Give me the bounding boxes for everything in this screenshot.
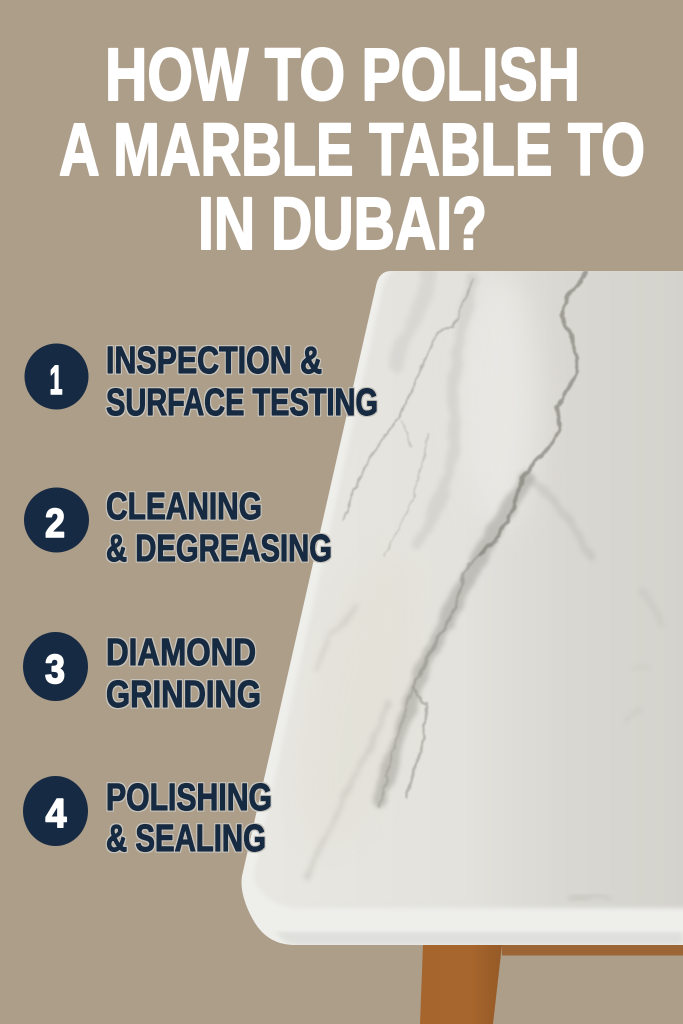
badge 3 [23,632,88,701]
step 2 [24,486,332,570]
step 4: 4 [46,790,67,836]
label 3: DIAMOND [106,632,256,674]
label 3: GRINDING [106,674,261,716]
illustration: marble table [241,268,683,1024]
table apron rail [502,945,683,956]
soft bands [417,280,473,543]
table top edge [241,271,683,945]
table bottom edge shade [275,932,683,945]
sharp veins [480,272,586,555]
table top surface and marble veins [253,268,683,908]
step 1: 1 [50,357,62,403]
step 4 [23,776,272,860]
step 3: 3 [45,646,65,692]
badge 4 [23,776,88,846]
label 4: POLISHING [106,777,272,819]
badge 1 [24,344,88,410]
badge 2 [24,488,89,552]
label 2: & DEGREASING [106,528,332,570]
label 2 [106,486,332,570]
label 1 [106,340,378,424]
title [59,33,645,265]
step 1 [24,340,378,424]
title: IN DUBAI? [198,182,487,265]
step 2: 2 [45,500,65,546]
step 3 [23,632,261,716]
label 3 [106,632,261,716]
table leg [420,945,502,1024]
label 1: INSPECTION & [106,340,322,382]
label 4: & SEALING [106,818,266,860]
label 4 [106,777,272,860]
label 1: SURFACE TESTING [106,382,378,424]
label 2: CLEANING [106,486,262,528]
